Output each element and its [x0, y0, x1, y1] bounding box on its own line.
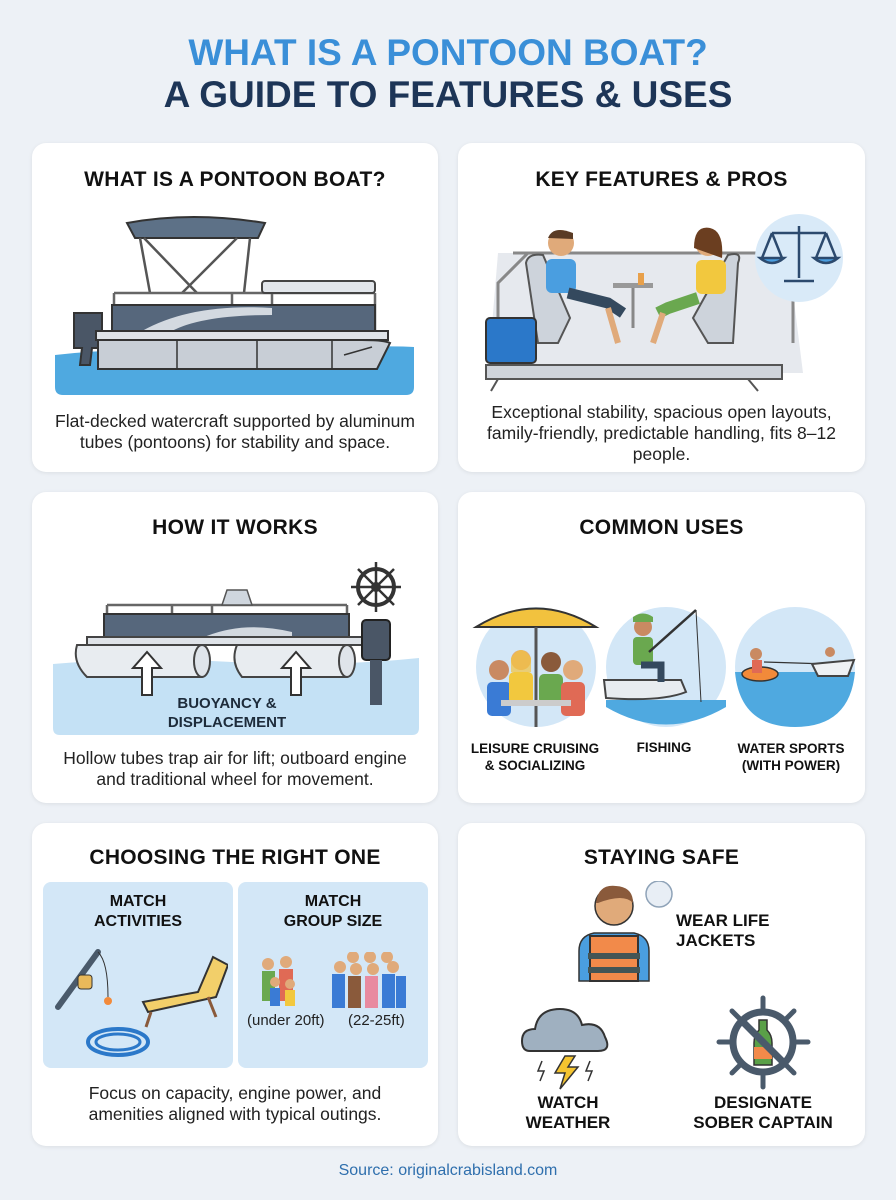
- source: Source: originalcrabisland.com: [339, 1162, 557, 1179]
- icon: leisure cruising: [472, 607, 600, 727]
- icon: water sports: [735, 607, 856, 727]
- description: [89, 1083, 381, 1124]
- box: match activities: MATCH: [110, 893, 166, 910]
- description: [487, 402, 836, 464]
- heading: KEY FEATURES & PROS: [535, 168, 788, 191]
- panel: what is a pontoon boat: [32, 143, 438, 472]
- illustration: pontoon boat: [55, 216, 414, 395]
- description: Focus on capacity, engine power, and: [89, 1083, 381, 1103]
- label: wear life jackets: WEAR LIFE: [676, 911, 770, 930]
- label: wear life jackets: [676, 911, 770, 950]
- label: designate sober captain: DESIGNATE: [714, 1093, 812, 1112]
- title: WHAT IS A PONTOON BOAT?: [188, 32, 708, 73]
- label: designate sober captain: [693, 1093, 833, 1132]
- panel: common uses: WATER SPORTS: [737, 741, 844, 756]
- panel: staying safe: [458, 823, 865, 1146]
- description: people.: [633, 444, 690, 464]
- box: match group size: GROUP SIZE: [284, 913, 382, 930]
- box: match activities: [43, 882, 233, 1068]
- title: [164, 32, 732, 115]
- description: [63, 748, 407, 789]
- heading: STAYING SAFE: [584, 846, 739, 869]
- panel: how it works: [32, 492, 438, 803]
- panel: key features: [458, 143, 865, 472]
- icon: fishing: [602, 607, 726, 727]
- labels: LEISURE CRUISING: [471, 741, 599, 756]
- panel: common uses: FISHING: [637, 740, 691, 755]
- panel: common uses: (WITH POWER): [742, 758, 840, 773]
- panel: choosing: [32, 823, 438, 1146]
- panel: choosing: (22-25ft): [348, 1012, 405, 1029]
- description: Exceptional stability, spacious open layouts,: [491, 402, 832, 422]
- box: match activities: ACTIVITIES: [94, 913, 182, 930]
- panel: common uses: [458, 492, 865, 803]
- labels: [471, 741, 599, 773]
- panel: choosing: (under 20ft): [247, 1012, 325, 1029]
- heading: COMMON USES: [579, 516, 744, 539]
- heading: CHOOSING THE RIGHT ONE: [89, 846, 381, 869]
- illustration: buoyancy diagram: [53, 562, 419, 735]
- label: watch weather: [526, 1093, 610, 1132]
- icon: storm cloud: [521, 1008, 608, 1090]
- icon: no alcohol wheel: [716, 996, 810, 1090]
- heading: WHAT IS A PONTOON BOAT?: [84, 168, 386, 191]
- box: match group size: MATCH: [305, 893, 361, 910]
- description: [55, 411, 415, 452]
- labels: & SOCIALIZING: [485, 758, 585, 773]
- heading: HOW IT WORKS: [152, 516, 318, 539]
- label: watch weather: WATCH: [537, 1093, 599, 1112]
- description: amenities aligned with typical outings.: [89, 1104, 381, 1124]
- illustration: family on deck: [485, 214, 843, 392]
- label: designate sober captain: SOBER CAPTAIN: [693, 1113, 833, 1132]
- description: tubes (pontoons) for stability and space.: [80, 432, 390, 452]
- title: A GUIDE TO FEATURES & USES: [164, 74, 732, 115]
- label: watch weather: WEATHER: [526, 1113, 610, 1132]
- description: Hollow tubes trap air for lift; outboard engine: [63, 748, 407, 768]
- description: and traditional wheel for movement.: [96, 769, 374, 789]
- description: Flat-decked watercraft supported by aluminum: [55, 411, 415, 431]
- description: family-friendly, predictable handling, fits 8–12: [487, 423, 836, 443]
- illustration: buoyancy diagram: DISPLACEMENT: [168, 714, 286, 731]
- illustration: buoyancy diagram: BUOYANCY &: [177, 695, 277, 712]
- box: match group size: [238, 882, 428, 1068]
- icon: life jacket person: [578, 881, 673, 982]
- label: wear life jackets: JACKETS: [676, 931, 755, 950]
